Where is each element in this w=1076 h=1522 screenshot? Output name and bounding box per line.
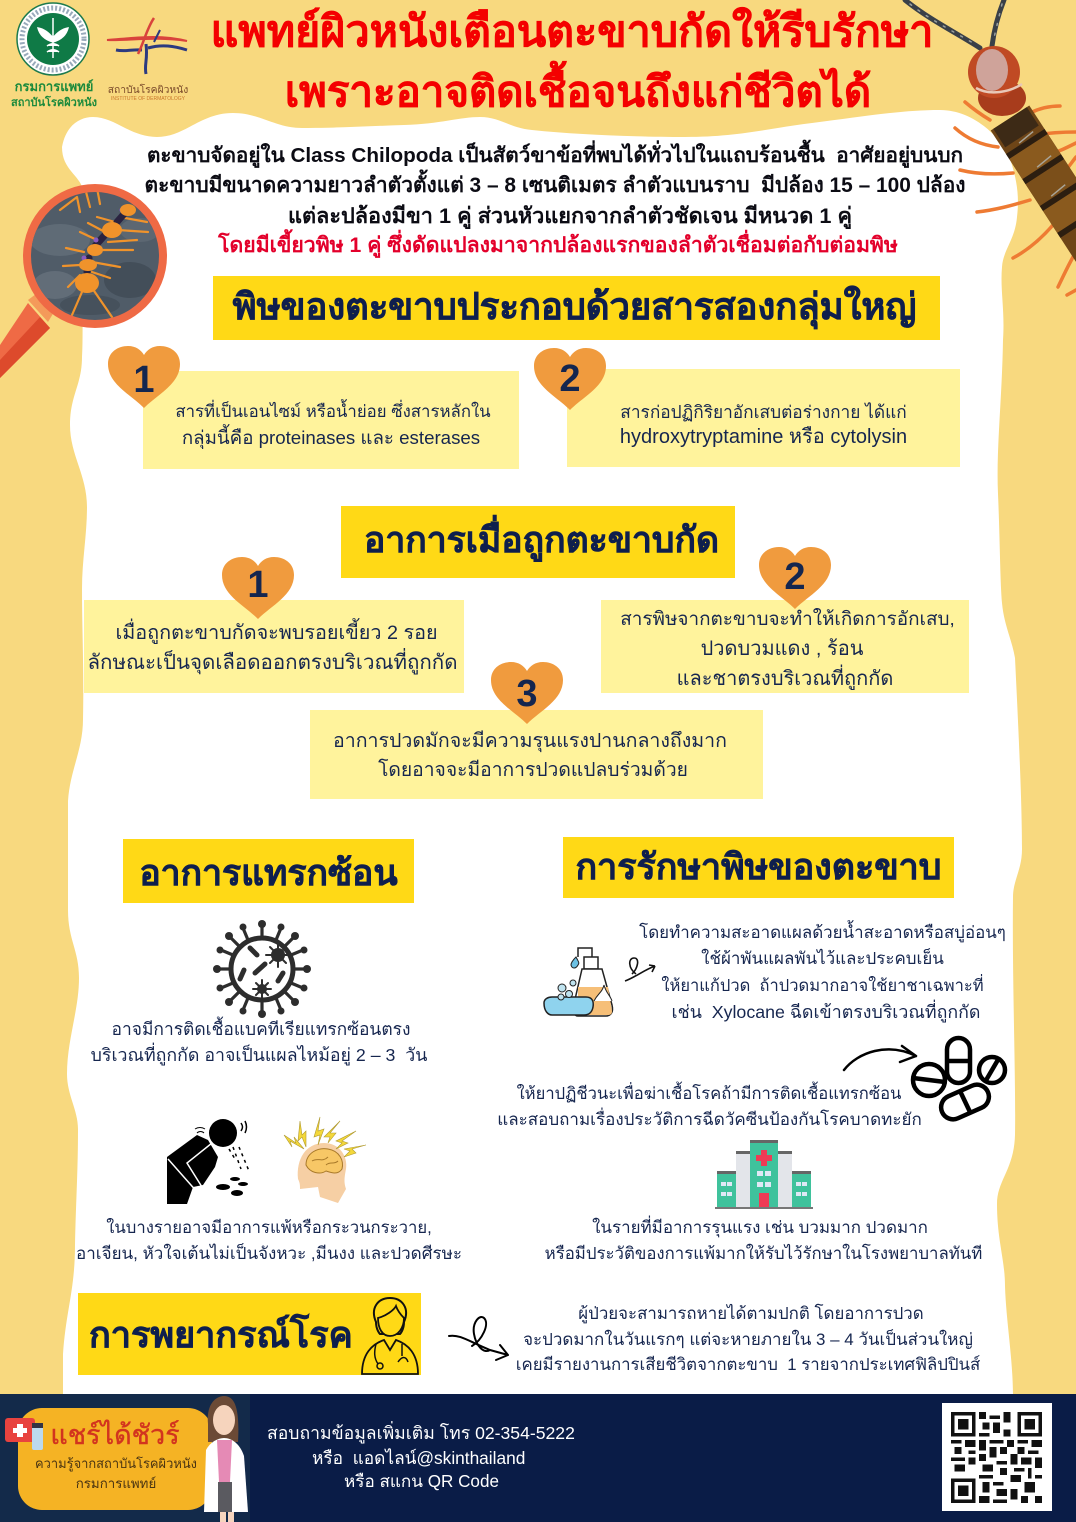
- heading: venom composition: [213, 276, 940, 340]
- icon: person vomiting: [167, 1119, 249, 1204]
- heading: symptoms: [341, 506, 735, 578]
- arrow: soap to text: [624, 957, 656, 982]
- panel: symptom 3: [310, 710, 763, 799]
- badge: venom 1: [108, 346, 180, 408]
- text: wound cleaning: [639, 920, 1006, 1022]
- heading: treatment: การรักษาพิษของตะขาบ: [575, 847, 942, 887]
- footer: share banner: กรมการแพทย์: [76, 1476, 156, 1491]
- text: wound cleaning: ใช้ผ้าพันแผลพันไว้และประคบเย็น: [701, 949, 944, 968]
- logo: institute of dermatology: INSTITUTE OF DERMATOLOGY: [111, 96, 185, 102]
- panel: venom group 2: สารก่อปฏิกิริยาอักเสบต่อร่างกาย ได้แก่: [620, 402, 907, 422]
- text: prognosis details: [516, 1304, 980, 1374]
- panel: venom group 1: สารที่เป็นเอนไซม์ หรือน้ำย่อย ซึ่งสารหลักใน: [175, 402, 491, 421]
- footer: contact text: หรือ แอดไลน์@skinthailand: [312, 1448, 525, 1468]
- icon: pills: [910, 1036, 1008, 1122]
- badge: venom 1: 1: [133, 359, 155, 401]
- text: prognosis details: เคยมีรายงานการเสียชีวิตจากตะขาบ 1 รายจากประเทศฟิลิปปินส์: [516, 1355, 980, 1374]
- panel: symptom 2: และชาตรงบริเวณที่ถูกกัด: [677, 668, 893, 690]
- footer: contact text: หรือ สแกน QR Code: [344, 1472, 499, 1491]
- text: bacterial infection: [91, 1016, 427, 1066]
- text: bacterial infection: อาจมีการติดเชื้อแบคทีเรียแทรกซ้อนตรง: [112, 1019, 410, 1039]
- text: antibiotics: ให้ยาปฏิชีวนะเพื่อฆ่าเชื้อโรคถ้ามีการติดเชื้อแทรกซ้อน: [517, 1084, 901, 1103]
- title: [211, 6, 933, 115]
- heading: prognosis: [78, 1293, 421, 1375]
- badge: symptom 2: 2: [784, 556, 806, 598]
- arrow: curved to pills: [842, 1044, 918, 1072]
- footer: contact text: สอบถามข้อมูลเพิ่มเติม โทร 02-354-5222: [267, 1423, 575, 1443]
- text: bacterial infection: บริเวณที่ถูกกัด อาจเป็นแผลไหม้อยู่ 2 – 3 วัน: [91, 1045, 427, 1065]
- intro text: แต่ละปล้องมีขา 1 คู่ ส่วนหัวแยกจากลำตัวชัดเจน มีหนวด 1 คู่: [288, 203, 852, 228]
- text: wound cleaning: เช่น Xylocane ฉีดเข้าตรงบริเวณที่ถูกกัด: [672, 1002, 980, 1022]
- footer: contact text: [267, 1421, 575, 1491]
- text: severe cases: หรือมีประวัติของการแพ้มากให้รับไว้รักษาในโรงพยาบาลทันที: [545, 1244, 982, 1263]
- logo: institute of dermatology: สถาบันโรคผิวหนัง: [108, 85, 188, 96]
- panel: symptom 1: [84, 600, 464, 693]
- panel: symptom 1: เมื่อถูกตะขาบกัดจะพบรอยเขี้ยว 2 รอย: [115, 622, 438, 644]
- logo: department of medical services: กรมการแพทย์: [15, 79, 93, 94]
- text: wound cleaning: โดยทำความสะอาดแผลด้วยน้ำสะอาดหรือสบู่อ่อนๆ: [639, 923, 1006, 942]
- intro text: [145, 140, 965, 258]
- logo: department of medical services: [11, 2, 97, 109]
- badge: venom 2: 2: [559, 358, 581, 400]
- panel: venom group 2: [567, 369, 960, 467]
- footer: share banner: ความรู้จากสถาบันโรคผิวหนัง: [35, 1456, 197, 1471]
- badge: symptom 1: [222, 557, 294, 619]
- icon: first aid kit: [5, 1418, 43, 1450]
- panel: symptom 1: ลักษณะเป็นจุดเลือดออกตรงบริเวณที่ถูกกัด: [87, 651, 458, 674]
- text: severe cases: ในรายที่มีอาการรุนแรง เช่น บวมมาก ปวดมาก: [592, 1218, 928, 1237]
- text: prognosis details: ผู้ป่วยจะสามารถหายได้ตามปกติ โดยอาการปวด: [578, 1304, 924, 1323]
- QR code: [942, 1403, 1052, 1511]
- logo: department of medical services: สถาบันโรคผิวหนัง: [11, 97, 97, 109]
- heading: prognosis: การพยากรณ์โรค: [89, 1314, 353, 1355]
- heading: venom composition: พิษของตะขาบประกอบด้วยสารสองกลุ่มใหญ่: [233, 286, 916, 327]
- panel: symptom 2: ปวดบวมแดง , ร้อน: [701, 638, 863, 660]
- intro text: ตะขาบมีขนาดความยาวลำตัวตั้งแต่ 3 – 8 เซนติเมตร ลำตัวแบนราบ มีปล้อง 15 – 100 ปล้อง: [145, 174, 965, 197]
- text: allergic symptoms: ในบางรายอาจมีอาการแพ้หรือกระวนกระวาย,: [106, 1218, 432, 1237]
- intro text: ตะขาบจัดอยู่ใน Class Chilopoda เป็นสัตว์ขาข้อที่พบได้ทั่วไปในแถบร้อนชื้น อาศัยอยู่บนบก: [147, 144, 963, 167]
- badge: venom 2: [534, 348, 606, 410]
- heading: complications: [123, 839, 414, 903]
- panel: symptom 2: [601, 600, 969, 693]
- footer: share banner: [0, 1394, 250, 1522]
- logo: institute of dermatology: [106, 17, 188, 102]
- centipede illustration: [902, 0, 1076, 297]
- panel: venom group 2: hydroxytryptamine หรือ cytolysin: [620, 426, 907, 448]
- title: แพทย์ผิวหนังเตือนตะขาบกัดให้รีบรักษา: [211, 8, 933, 56]
- text: prognosis details: จะปวดมากในวันแรกๆ แต่จะหายภายใน 3 – 4 วันเป็นส่วนใหญ่: [523, 1330, 973, 1349]
- footer: share banner: แชร์ได้ชัวร์: [50, 1420, 180, 1450]
- footer band: [0, 1394, 1076, 1522]
- badge: symptom 3: 3: [516, 673, 538, 715]
- icon: doctor: [204, 1396, 248, 1522]
- heading: complications: อาการแทรกซ้อน: [139, 853, 398, 893]
- icon: magnifying glass with centipede photo: [0, 184, 167, 378]
- heading: symptoms: อาการเมื่อถูกตะขาบกัด: [364, 520, 719, 560]
- panel: symptom 3: โดยอาจจะมีอาการปวดแปลบร่วมด้วย: [378, 760, 688, 781]
- arrow: prognosis to text: [448, 1316, 509, 1361]
- icon: female doctor: [361, 1297, 419, 1375]
- icon: soap and water: [543, 947, 614, 1017]
- intro text: โดยมีเขี้ยวพิษ 1 คู่ ซึ่งดัดแปลงมาจากปล้องแรกของลำตัวเชื่อมต่อกับต่อมพิษ: [218, 234, 898, 257]
- badge: symptom 3: [491, 662, 563, 724]
- badge: symptom 2: [759, 547, 831, 609]
- badge: symptom 1: 1: [247, 564, 269, 606]
- icon: headache head with brain: [284, 1116, 366, 1203]
- text: antibiotics: [497, 1082, 922, 1129]
- panel: symptom 3: อาการปวดมักจะมีความรุนแรงปานกลางถึงมาก: [333, 730, 727, 752]
- text: antibiotics: และสอบถามเรื่องประวัติการฉีดวัคซีนป้องกันโรคบาดทะยัก: [497, 1110, 922, 1129]
- panel: symptom 2: สารพิษจากตะขาบจะทำให้เกิดการอักเสบ,: [620, 609, 955, 630]
- text: allergic symptoms: อาเจียน, หัวใจเต้นไม่เป็นจังหวะ ,มีนงง และปวดศีรษะ: [76, 1244, 462, 1263]
- text: wound cleaning: ให้ยาแก้ปวด ถ้าปวดมากอาจใช้ยาชาเฉพาะที่: [661, 977, 984, 995]
- icon: bacteria virus: [213, 920, 311, 1018]
- panel: venom group 1: กลุ่มนี้คือ proteinases และ esterases: [182, 427, 480, 448]
- text: allergic symptoms: [76, 1218, 462, 1263]
- text: severe cases: [545, 1216, 982, 1263]
- icon: hospital: [715, 1140, 813, 1209]
- title: เพราะอาจติดเชื้อจนถึงแก่ชีวิตได้: [285, 68, 871, 115]
- panel: venom group 1: [143, 371, 519, 469]
- heading: treatment: [563, 837, 954, 898]
